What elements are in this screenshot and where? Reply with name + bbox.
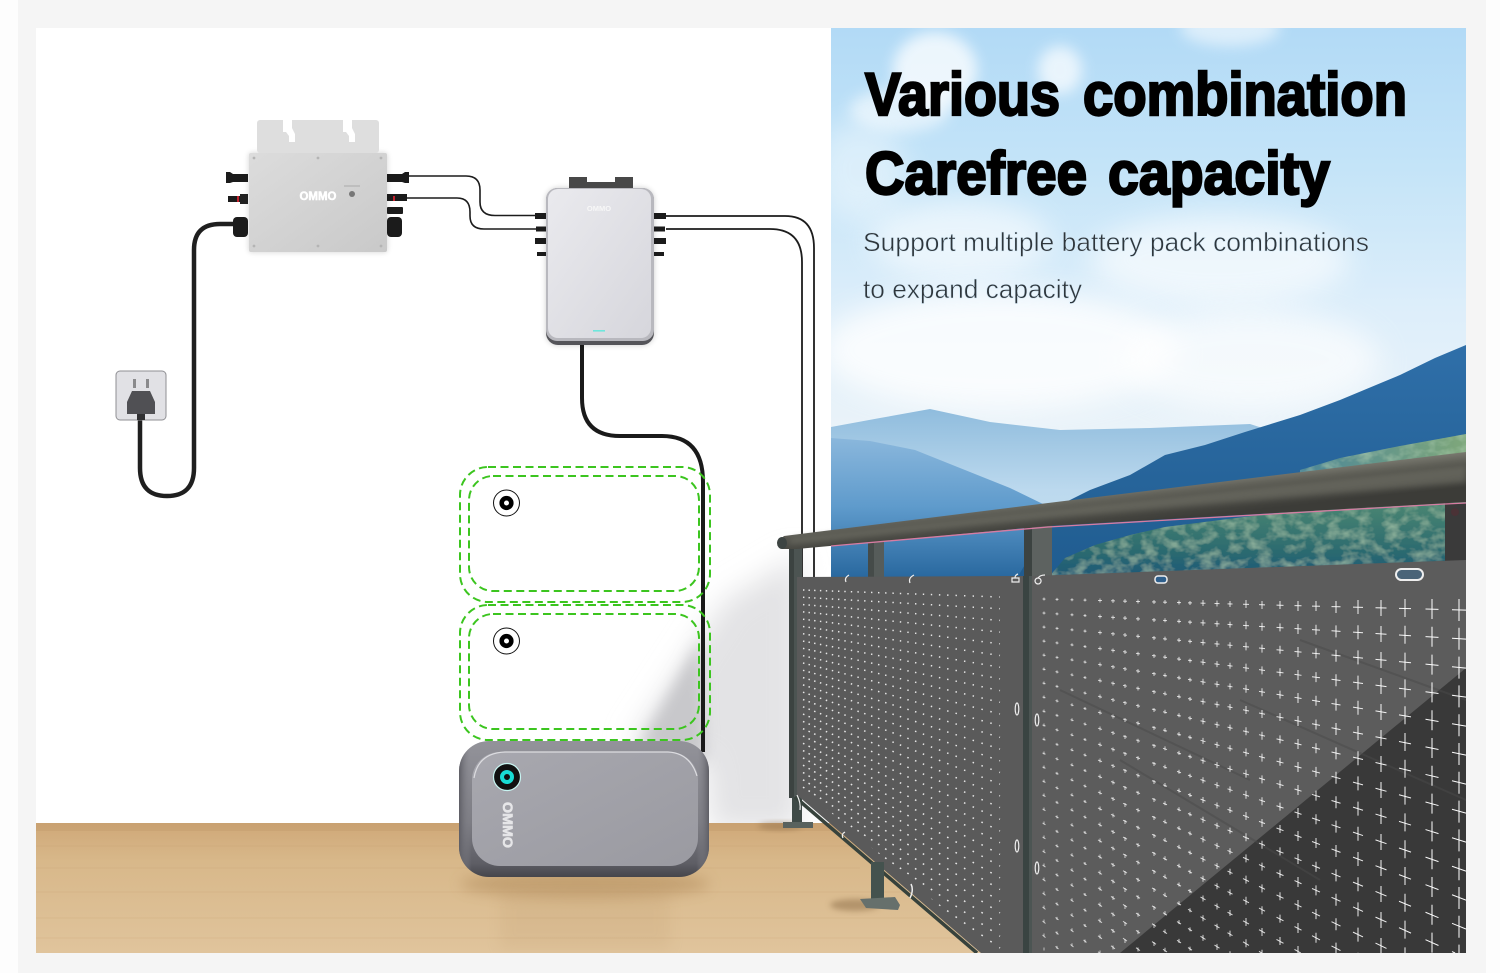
white wall <box>36 28 831 830</box>
inverter connectors <box>226 172 409 237</box>
railing foot <box>860 862 900 910</box>
slot 1 outer <box>460 467 710 602</box>
gateway side connectors <box>535 213 666 256</box>
title <box>865 61 1407 207</box>
subtitle <box>863 227 1369 304</box>
inverter screws <box>253 157 382 247</box>
panel mounting eyelets and hooks <box>797 569 1423 898</box>
subtitle: to expand capacity <box>863 274 1082 304</box>
power cable: socket to inverter <box>140 224 234 496</box>
wooden floor <box>36 822 1000 953</box>
thin cables: inverter to gateway <box>407 176 536 229</box>
battery logo: OMMO <box>500 802 516 848</box>
subtitle: Support multiple battery pack combinations <box>863 227 1369 257</box>
faint cell seams <box>1060 640 1439 842</box>
microinverter <box>226 120 409 252</box>
center post <box>1023 576 1032 953</box>
slot 2 inner <box>469 614 699 729</box>
battery power button <box>494 764 520 790</box>
balcony handrail <box>777 452 1466 549</box>
mounting plate <box>257 120 379 153</box>
dark post behind panel, right <box>1445 503 1466 563</box>
dashed battery slots <box>460 467 710 740</box>
title: Various <box>865 61 1060 128</box>
inverter logo: OMMO <box>300 191 337 203</box>
title: Carefree <box>865 140 1087 207</box>
solar panel: right <box>1031 560 1466 953</box>
battery cable <box>582 345 703 752</box>
dark reflection <box>1120 668 1466 953</box>
solar cell dots: left <box>803 590 1000 948</box>
title: capacity <box>1108 140 1331 207</box>
slot 1 button <box>494 490 520 516</box>
slot 2 outer <box>460 605 710 740</box>
balcony posts <box>783 522 1052 828</box>
wall socket with plug <box>116 371 166 420</box>
cables from gateway to solar panel <box>666 216 814 577</box>
solar panel: left <box>795 576 1023 953</box>
gateway unit <box>535 177 666 345</box>
gateway logo: OMMO <box>587 204 611 213</box>
mountains <box>831 345 1466 590</box>
sky with clouds <box>831 28 1466 430</box>
slot 1 inner <box>469 476 699 591</box>
title: combination <box>1083 61 1407 128</box>
battery pack <box>459 741 709 877</box>
slot 2 button <box>494 628 520 654</box>
solar cell stars: right <box>1042 598 1466 953</box>
